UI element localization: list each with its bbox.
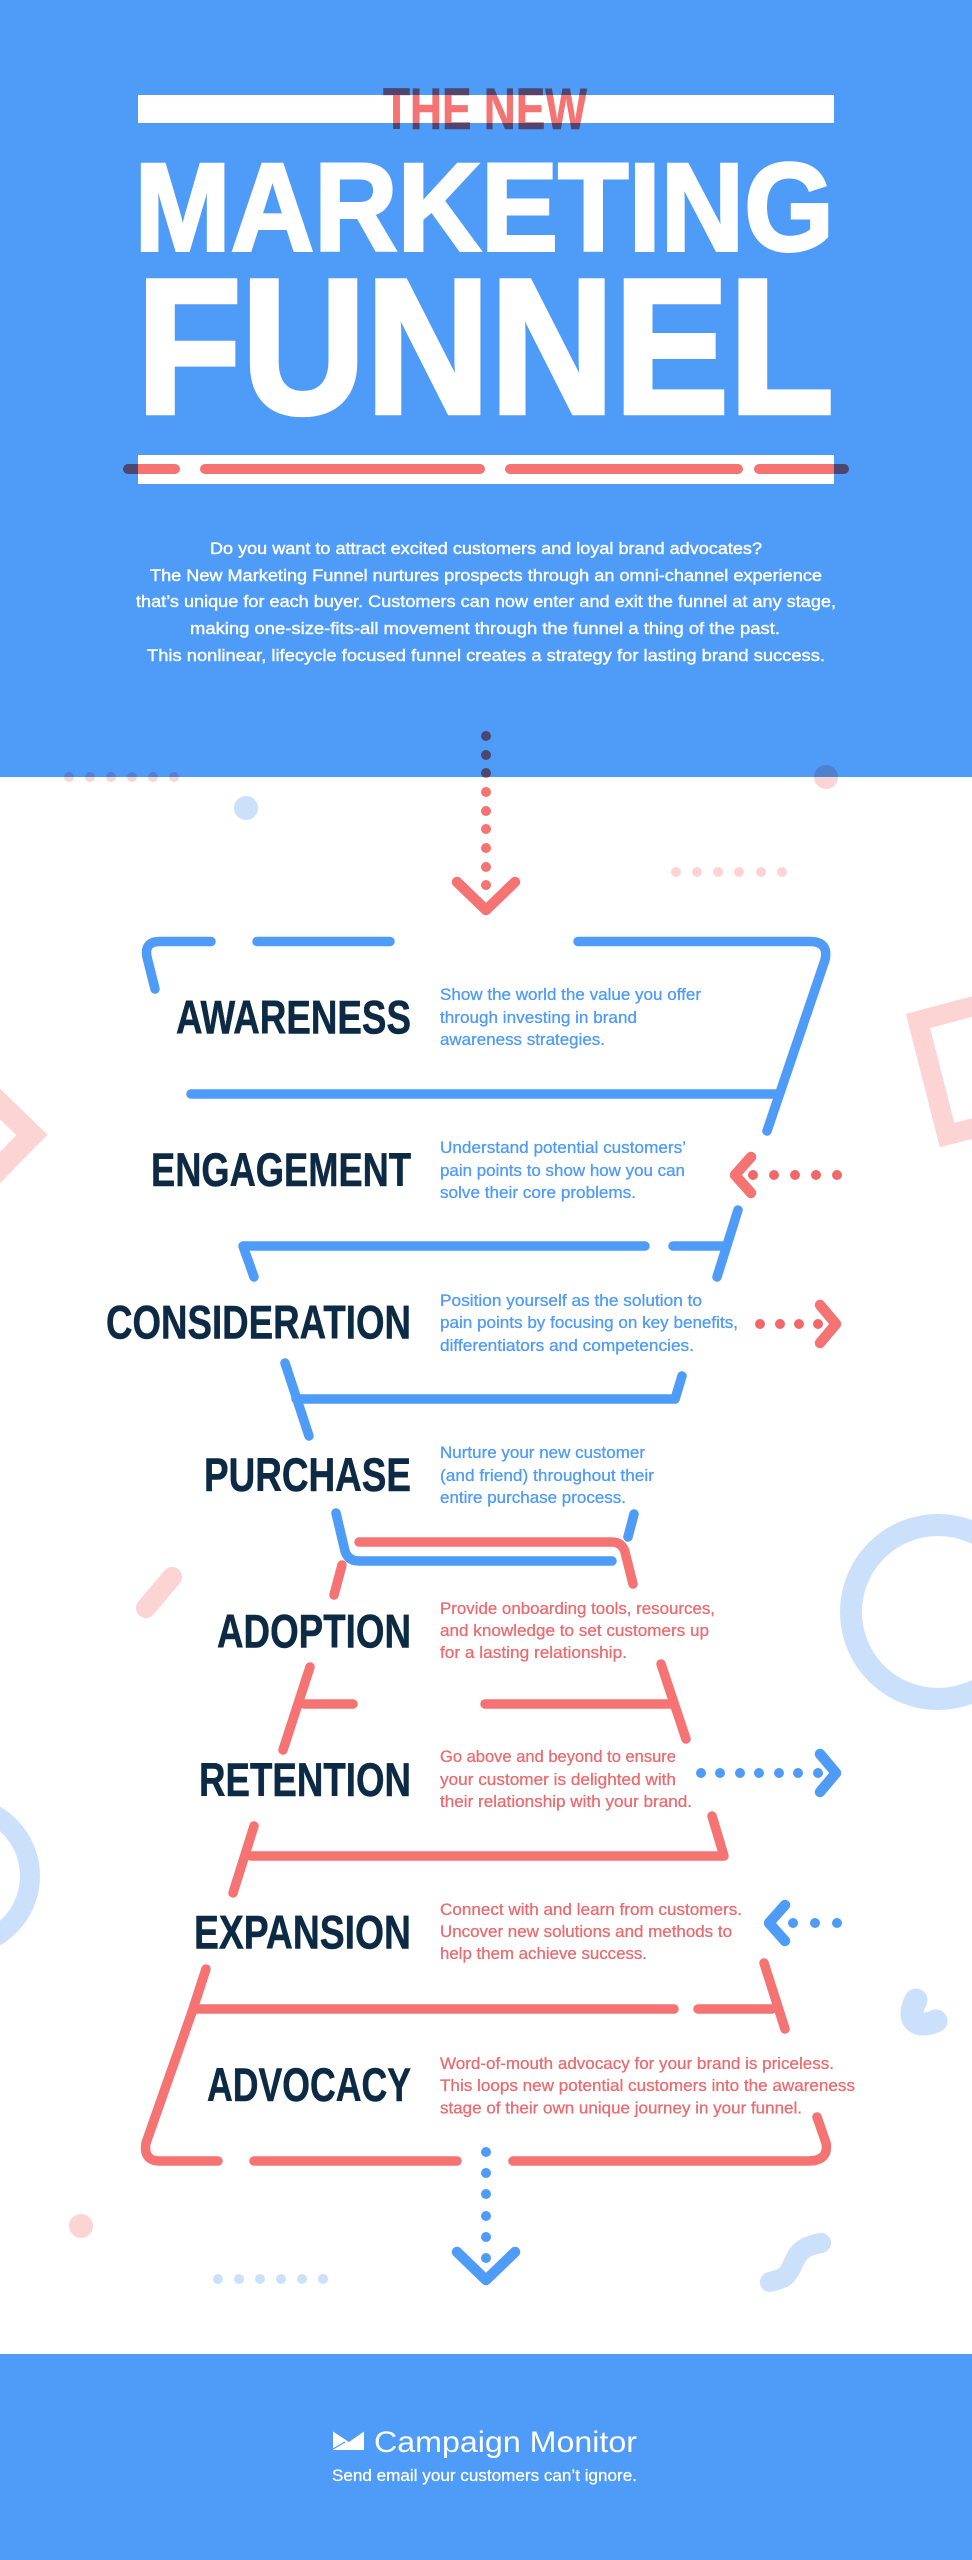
funnel outline: retention bbox=[233, 1816, 724, 1893]
panel: awareness stage bbox=[147, 942, 826, 1131]
funnel outline: awareness bbox=[147, 942, 826, 1131]
description: awareness: awareness strategies. bbox=[440, 1031, 605, 1049]
decorative pink square bbox=[918, 990, 972, 1135]
description: consideration bbox=[440, 1292, 738, 1355]
description: adoption: Provide onboarding tools, resources, bbox=[440, 1600, 715, 1618]
description: consideration: pain points by focusing on key benefits, bbox=[440, 1314, 738, 1332]
wordmark: Campaign Monitor bbox=[374, 2426, 637, 2459]
title: funnel: FUNNEL bbox=[136, 239, 834, 454]
arrow: consideration exit bbox=[755, 1305, 836, 1343]
arrow: exiting funnel bbox=[457, 2147, 515, 2280]
panel: consideration stage bbox=[106, 1292, 836, 1436]
panel: purchase stage bbox=[204, 1444, 655, 1561]
decorative pink circle bottom bbox=[69, 2214, 93, 2238]
heading: engagement: ENGAGEMENT bbox=[151, 1144, 411, 1197]
decorative pink dot row right bbox=[671, 867, 787, 877]
panel: retention stage bbox=[199, 1748, 836, 1893]
heading: consideration: CONSIDERATION bbox=[106, 1296, 411, 1350]
description: expansion: Uncover new solutions and methods to bbox=[440, 1923, 732, 1941]
description: awareness: through investing in brand bbox=[440, 1009, 637, 1027]
description: awareness: Show the world the value you offer bbox=[440, 986, 702, 1004]
description: consideration: Position yourself as the solution to bbox=[440, 1292, 702, 1310]
panel: engagement stage bbox=[151, 1139, 842, 1277]
decorative blue squiggle bbox=[770, 2243, 821, 2282]
decorative blue ring right bbox=[851, 1525, 972, 1699]
heading: awareness: AWARENESS bbox=[176, 992, 411, 1044]
decorative blue circle top bbox=[234, 796, 258, 820]
description: retention: your customer is delighted with bbox=[440, 1771, 676, 1789]
description: adoption bbox=[440, 1600, 715, 1662]
description: engagement: Understand potential customers’ bbox=[440, 1139, 686, 1157]
title: marketing: MARKETING bbox=[134, 136, 834, 278]
description: adoption: for a lasting relationship. bbox=[440, 1644, 627, 1662]
description: engagement bbox=[440, 1139, 686, 1202]
funnel outline: advocacy bbox=[146, 2012, 826, 2161]
arrow: retention exit bbox=[696, 1754, 836, 1792]
decorative blue hook bbox=[912, 2000, 936, 2024]
intro paragraph: that’s unique for each buyer. Customers can now enter and exit the funnel at any stage, bbox=[136, 592, 836, 611]
description: consideration: differentiators and competencies. bbox=[440, 1337, 694, 1355]
decorative pink capsule bbox=[146, 1577, 172, 1608]
heading: purchase: PURCHASE bbox=[204, 1449, 411, 1502]
intro paragraph: Do you want to attract excited customers and loyal brand advocates? bbox=[210, 539, 762, 558]
description: purchase bbox=[440, 1444, 655, 1507]
heading: expansion: EXPANSION bbox=[194, 1906, 411, 1960]
description: expansion bbox=[440, 1901, 742, 1963]
heading: advocacy: ADVOCACY bbox=[207, 2059, 411, 2112]
description: purchase: Nurture your new customer bbox=[440, 1444, 646, 1462]
funnel outline: engagement bbox=[243, 1210, 738, 1277]
arrow: entering funnel bbox=[457, 731, 515, 910]
description: advocacy: stage of their own unique journey in your funnel. bbox=[440, 2100, 802, 2118]
panel: advocacy stage bbox=[146, 2012, 855, 2161]
decorative pink circle on header edge bbox=[814, 765, 838, 789]
description: purchase: (and friend) throughout their bbox=[440, 1467, 655, 1485]
top white bar bbox=[138, 95, 834, 123]
decorative pink chevron bbox=[0, 1073, 32, 1200]
description: expansion: help them achieve success. bbox=[440, 1945, 647, 1963]
title underline dashes bbox=[128, 464, 844, 474]
heading: retention: RETENTION bbox=[199, 1754, 411, 1807]
description: retention bbox=[440, 1748, 692, 1811]
intro paragraph bbox=[136, 539, 836, 665]
funnel outline: consideration bbox=[285, 1363, 682, 1436]
description: adoption: and knowledge to set customers up bbox=[440, 1622, 709, 1640]
intro paragraph: making one-size-fits-all movement through the funnel a thing of the past. bbox=[190, 619, 780, 638]
funnel outline: expansion bbox=[192, 1963, 785, 2029]
panel: footer background bbox=[0, 2354, 972, 2560]
icon: envelope bbox=[333, 2432, 364, 2450]
description: advocacy: This loops new potential customers into the awareness bbox=[440, 2077, 855, 2095]
heading: adoption: ADOPTION bbox=[217, 1606, 411, 1658]
arrow: engagement entry bbox=[735, 1157, 842, 1193]
funnel outline: adoption bbox=[283, 1542, 686, 1750]
description: retention: their relationship with your brand. bbox=[440, 1793, 692, 1811]
description: expansion: Connect with and learn from customers. bbox=[440, 1901, 742, 1919]
footer tagline: Send email your customers can’t ignore. bbox=[332, 2466, 637, 2485]
description: awareness bbox=[440, 986, 702, 1049]
description: engagement: solve their core problems. bbox=[440, 1184, 636, 1202]
description: advocacy bbox=[440, 2055, 855, 2118]
description: purchase: entire purchase process. bbox=[440, 1489, 626, 1507]
description: retention: Go above and beyond to ensure bbox=[440, 1748, 676, 1766]
description: engagement: pain points to show how you can bbox=[440, 1162, 685, 1180]
panel: expansion stage bbox=[192, 1901, 842, 2029]
decorative blue ring left bbox=[0, 1806, 30, 1946]
footer logo: Campaign Monitor bbox=[333, 2426, 637, 2459]
decorative blue dot row bottom bbox=[213, 2274, 328, 2284]
title: the new: THE NEW bbox=[383, 77, 587, 142]
panel: header background bbox=[0, 0, 972, 777]
intro paragraph: The New Marketing Funnel nurtures prospects through an omni-channel experience bbox=[150, 566, 822, 585]
funnel outline: purchase bbox=[336, 1513, 634, 1561]
decorative pink dot row left bbox=[64, 772, 179, 782]
arrow: expansion entry bbox=[769, 1905, 842, 1941]
description: advocacy: Word-of-mouth advocacy for your brand is priceless. bbox=[440, 2055, 834, 2073]
bottom white bar bbox=[138, 455, 834, 484]
panel: adoption stage bbox=[217, 1542, 715, 1750]
intro paragraph: This nonlinear, lifecycle focused funnel creates a strategy for lasting brand success. bbox=[147, 646, 825, 665]
